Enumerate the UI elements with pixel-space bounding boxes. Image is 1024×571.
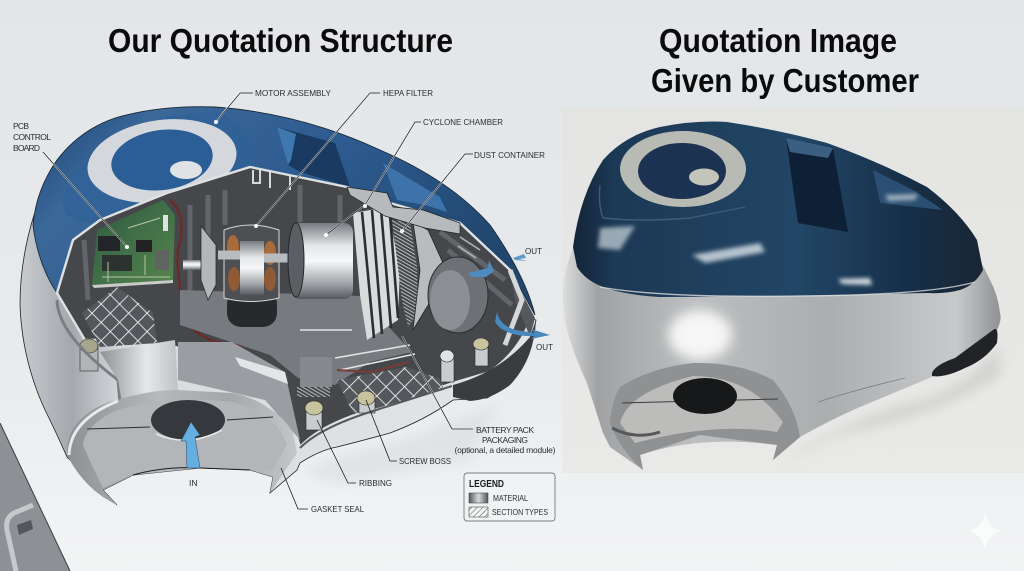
label: out upper: OUT	[525, 246, 542, 256]
label: in: IN	[189, 478, 198, 488]
arrow: internal air flow	[468, 260, 494, 277]
arrow: air in	[181, 422, 200, 468]
sparkle watermark	[968, 512, 1002, 550]
side ridge	[57, 300, 120, 403]
top shell slot	[277, 127, 350, 187]
mesh panel left	[82, 287, 157, 347]
stator motor	[218, 225, 290, 327]
label: motor assembly: MOTOR ASSEMBLY	[255, 88, 331, 98]
red wire harness	[337, 362, 408, 372]
label: pcb control board: PCB	[13, 121, 29, 131]
label: cyclone chamber: CYCLONE CHAMBER	[423, 117, 503, 127]
dust container frame	[413, 222, 443, 330]
mesh panel bottom	[337, 367, 443, 413]
leader: hepa filter	[254, 93, 380, 228]
arrow: air out lower	[495, 312, 550, 339]
legend label: section types: SECTION TYPES	[492, 507, 548, 517]
rear vent	[932, 329, 998, 376]
label: out lower: OUT	[536, 342, 553, 352]
navy/silver divider	[600, 282, 975, 296]
shell window	[383, 163, 447, 212]
dark rubber grip	[453, 320, 536, 401]
label: battery pack packaging: (optional, a detailed module)	[454, 445, 556, 455]
chamber slats	[458, 237, 480, 258]
label: gasket seal: GASKET SEAL	[311, 504, 364, 514]
rear grille	[510, 270, 535, 337]
shell recess	[63, 113, 254, 223]
label: hepa filter: HEPA FILTER	[383, 88, 433, 98]
interior ribs	[84, 185, 512, 305]
legend swatch: section types	[469, 507, 488, 517]
filter stack	[353, 207, 400, 340]
gloss highlights	[598, 194, 918, 285]
leader: pcb control board	[43, 152, 129, 249]
arrow: air out upper	[513, 254, 527, 261]
silver lower body	[563, 240, 1001, 470]
lower structural lines	[300, 330, 415, 370]
dust mesh	[392, 220, 418, 327]
top slot	[786, 138, 848, 232]
leader: ribbing	[317, 420, 356, 483]
front inlet housing	[67, 340, 300, 505]
disc chamber	[428, 257, 488, 333]
legend label: material: MATERIAL	[493, 493, 528, 503]
customer reference photo	[562, 108, 1024, 473]
label: pcb control board: BOARD	[13, 143, 40, 153]
inlet hole	[673, 378, 737, 414]
leader: screw boss	[366, 400, 397, 461]
contact shadow	[780, 345, 1000, 462]
heading: quotation image given by customer: Given by Customer	[651, 62, 919, 99]
motor base and floor	[180, 290, 412, 385]
soft shadow under body	[300, 405, 500, 485]
label: screw boss: SCREW BOSS	[399, 456, 451, 466]
rear window	[873, 170, 943, 210]
body seam	[818, 378, 905, 402]
label: ribbing: RIBBING	[359, 478, 392, 488]
wires	[170, 200, 245, 345]
silver rim stripe	[300, 386, 452, 448]
heading: our quotation structure: Our Quotation Structure	[108, 22, 453, 59]
arch side flange	[69, 401, 118, 455]
leader: motor assembly	[214, 92, 253, 124]
blue top shell	[33, 107, 535, 315]
label: battery pack packaging: BATTERY PACK	[476, 425, 534, 435]
handle in bottom-left corner	[0, 423, 70, 571]
inlet hole	[151, 400, 225, 440]
legend title: LEGEND	[469, 479, 504, 490]
label: dust container: DUST CONTAINER	[474, 150, 545, 160]
heading: quotation image given by customer	[651, 22, 919, 99]
block above arch	[100, 340, 178, 403]
cutaway product illustration	[20, 107, 550, 505]
label: pcb control board: CONTROL	[13, 132, 51, 142]
interior cavity	[57, 167, 530, 447]
leader: battery pack packaging	[402, 336, 473, 429]
screw bosses	[80, 338, 489, 430]
ring logo	[620, 131, 746, 207]
leader lines and callouts	[13, 88, 556, 514]
leader: cyclone chamber	[324, 122, 421, 237]
leader: dust container	[400, 154, 473, 233]
navy top shell	[573, 122, 983, 297]
inlet arch	[610, 363, 800, 470]
lid seam	[599, 185, 745, 220]
label: battery pack packaging: PACKAGING	[482, 435, 528, 445]
ring logo	[82, 110, 242, 212]
upper chamber bracket	[347, 187, 460, 234]
photo background	[562, 108, 1024, 473]
aluminium cylinder	[288, 223, 353, 299]
heading: quotation image given by customer: Quotation Image	[659, 22, 897, 59]
fan impeller	[183, 226, 216, 300]
legend swatch: material	[469, 493, 488, 503]
leader: gasket seal	[281, 468, 308, 509]
inlet arch	[67, 390, 297, 505]
silver lower housing	[20, 215, 536, 505]
legend box	[464, 473, 555, 521]
PCB control board	[92, 200, 175, 288]
control block and spring	[297, 357, 332, 397]
silver highlight	[668, 310, 732, 360]
